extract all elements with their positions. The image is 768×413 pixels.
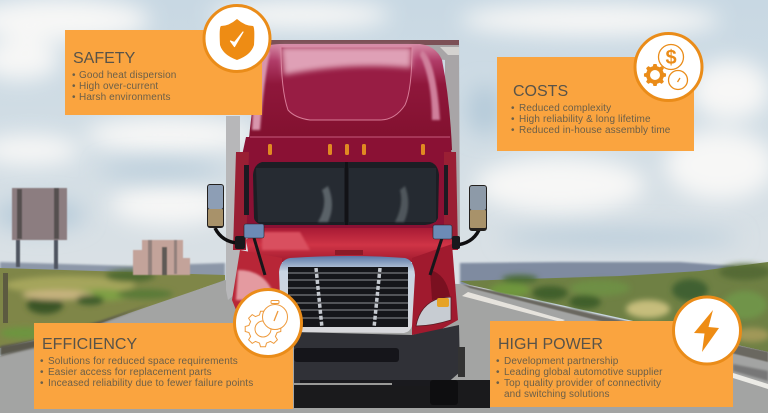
list: efficiency points: Inceased reliability due to fewer failure points: [48, 378, 253, 389]
icon: coin, gear and gauge: [635, 34, 702, 100]
windshield: [253, 162, 439, 225]
heading: costs: COSTS: [513, 83, 568, 100]
left mirror: [207, 184, 224, 228]
icon: lightning bolt: [674, 297, 740, 364]
list: costs points: •: [511, 114, 515, 125]
list: high power points: Development partnership: [504, 356, 619, 367]
list: efficiency points: •: [40, 367, 44, 378]
cab pillars: [233, 152, 249, 250]
list: high power points: Leading global automotive supplier: [504, 367, 663, 378]
roadside vegetation left: [0, 268, 225, 348]
panel: costs: [497, 34, 702, 151]
grille: [279, 256, 415, 333]
marker lights: [268, 144, 425, 155]
icon: shield with check: [204, 6, 270, 72]
list: safety points: High over-current: [79, 81, 158, 92]
cab front upper: [240, 137, 452, 234]
list: efficiency points: •: [40, 356, 44, 367]
list: safety points: Good heat dispersion: [79, 70, 176, 81]
list: efficiency points: Solutions for reduced space requirements: [48, 356, 238, 367]
list: costs points: •: [511, 103, 515, 114]
list: safety points: •: [72, 81, 76, 92]
background photo: sky and clouds: [0, 0, 768, 290]
bumper: [294, 325, 460, 385]
trailer: [226, 116, 240, 300]
hood: [246, 228, 452, 262]
list: efficiency points: Easier access for replacement parts: [48, 367, 212, 378]
list: costs points: High reliability & long lifetime: [519, 114, 651, 125]
small mirrors: [244, 224, 264, 238]
roadside vegetation right: [460, 262, 768, 352]
lower cab flanks: [232, 250, 295, 340]
truck: [207, 40, 490, 408]
list: high power points: Top quality provider of connectivity: [504, 378, 661, 389]
distant hills: [0, 262, 735, 285]
roadside billboard: [12, 188, 67, 269]
panel: efficiency: [34, 290, 302, 409]
road shadow: [294, 380, 490, 408]
icon: coin, gear and gauge: $: [665, 47, 677, 69]
list: costs points: •: [511, 125, 515, 136]
list: high power points: •: [496, 378, 500, 389]
list: safety points: •: [72, 70, 76, 81]
cab roof fairing: [248, 44, 452, 150]
list: safety points: Harsh environments: [79, 92, 171, 103]
heading: safety: SAFETY: [73, 50, 136, 67]
heading: high power: HIGH POWER: [498, 336, 603, 353]
wheels: [430, 380, 458, 405]
list: costs points: Reduced in-house assembly time: [519, 125, 671, 136]
icon: gear and stopwatch: [234, 290, 302, 356]
list: costs points: Reduced complexity: [519, 103, 611, 114]
mirror arms: [215, 228, 238, 243]
right mirror: [469, 185, 487, 231]
list: efficiency points: •: [40, 378, 44, 389]
road: [0, 280, 768, 413]
headlight: [416, 297, 451, 326]
list: safety points: •: [72, 92, 76, 103]
panel: high power: [490, 297, 740, 407]
panel: safety: [65, 6, 270, 115]
list: high power points: •: [496, 356, 500, 367]
distant building: [133, 240, 190, 275]
heading: efficiency: EFFICIENCY: [42, 336, 137, 353]
list: high power points: •: [496, 367, 500, 378]
list: high power points: and switching solutions: [504, 389, 610, 400]
